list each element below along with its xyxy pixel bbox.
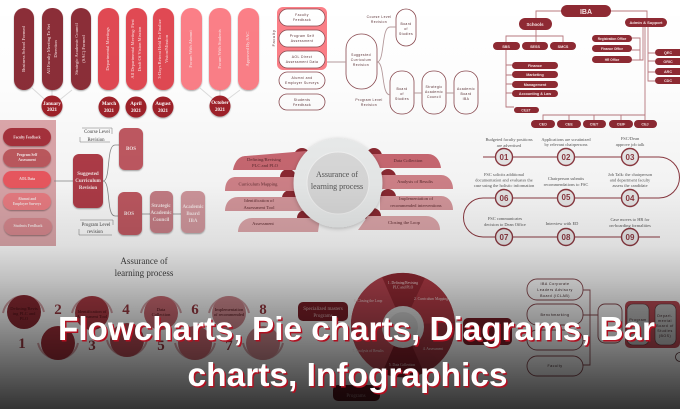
panel: organisation chart: CEJ <box>641 122 649 126</box>
chart: numbered circle steps: Data <box>157 307 165 312</box>
chart: pie diagram: 8. Closing the Loop <box>354 299 382 303</box>
panel: hiring process timeline <box>464 136 679 246</box>
panel: organisation chart: HR Office <box>605 58 619 62</box>
panel: curriculum revision outline flow: Council <box>427 95 441 99</box>
panel: timeline pills: All Departmental Meeting: First <box>130 19 135 79</box>
panel: hiring process timeline: Case moves to HR for <box>610 217 650 222</box>
title <box>58 310 657 394</box>
title: charts, Infographics <box>189 358 509 394</box>
diagram: assurance of learning process hub: recommended interventions <box>390 203 442 208</box>
panel: organisation chart: CED <box>539 122 547 126</box>
panel: curriculum revision filled flow: Revision <box>87 138 105 143</box>
panel: advisory board flow: Depart- <box>657 314 673 318</box>
panel: timeline pills <box>14 8 259 118</box>
panel: advisory board flow <box>527 279 680 376</box>
panel: hiring process timeline: 07 <box>500 233 509 242</box>
panel: hiring process timeline: assess the candidate <box>612 183 648 188</box>
panel: hiring process timeline: case using the holistic information <box>474 183 535 188</box>
chart: pie diagram: PLC and PLO <box>393 286 414 290</box>
title: Flowcharts, Pie charts, Diagrams, Bar <box>60 312 657 348</box>
panel: timeline pills: Direction <box>53 40 58 58</box>
chart: numbered circle steps: Defining/Revis <box>10 306 38 311</box>
panel: hiring process timeline: FSC/Dean <box>621 136 640 141</box>
panel: hiring process timeline: are advertised <box>497 143 522 148</box>
panel: timeline pills: August <box>155 102 171 107</box>
panel: organisation chart: Finance Office <box>601 47 623 51</box>
panel: timeline pills: (SAC) Formed <box>81 35 86 63</box>
chart: pie diagram <box>298 273 512 401</box>
panel: curriculum revision outline flow: Assessment Data <box>286 60 318 64</box>
panel: advisory board flow: Faculty <box>547 364 563 368</box>
panel: organisation chart: CIET <box>590 122 599 126</box>
panel: hiring process timeline: recommendations to FSC <box>544 182 588 187</box>
panel: timeline pills: Vision/Mission <box>164 34 169 63</box>
panel: organisation chart: CEE <box>565 122 573 126</box>
text: assurance of learning process caption <box>115 256 174 278</box>
diagram: assurance of learning process hub: Identification of <box>244 198 274 203</box>
panel: hiring process timeline: and department faculty <box>610 178 651 182</box>
panel: hiring process timeline: Chairperson submits <box>548 176 584 181</box>
panel: curriculum revision outline flow: Academic <box>457 87 475 91</box>
panel: curriculum revision outline flow: Feedback <box>293 18 311 22</box>
diagram: assurance of learning process hub <box>225 138 453 232</box>
diagram: assurance of learning process hub: Assessment Tool <box>243 205 275 210</box>
panel: organisation chart: SBS <box>502 45 510 49</box>
panel: hiring process timeline: 01 <box>500 153 509 162</box>
panel: timeline pills: Draft Of Vision Mission <box>137 26 142 71</box>
diagram: assurance of learning process hub: Curriculum Mapping <box>239 182 278 186</box>
panel: curriculum revision filled flow: Strategic <box>151 204 171 209</box>
panel: curriculum revision outline flow: Faculty <box>271 29 276 47</box>
text: assurance of learning process caption: learning process <box>115 268 174 278</box>
panel: advisory board flow: IBA Corporate <box>540 282 570 286</box>
panel: organisation chart: IBA <box>580 9 592 16</box>
panel: hiring process timeline: on-boarding formalities <box>609 223 651 228</box>
panel: curriculum revision outline flow: Board <box>396 87 408 91</box>
panel: curriculum revision outline flow: Feedback <box>293 103 311 107</box>
chart: numbered circle steps: ing PLC and <box>13 311 36 316</box>
panel: curriculum revision filled flow: Alumni and <box>18 197 36 201</box>
chart: numbered circle steps: 6 <box>191 302 199 318</box>
panel: curriculum revision outline flow: Curriculum <box>351 58 371 62</box>
panel: advisory board flow: (BOS) <box>659 334 671 338</box>
panel: hiring process timeline: Budgeted faculty positions <box>485 137 533 142</box>
panel: timeline pills: 3-Days Retreat Held To Finalize <box>157 19 162 79</box>
chart: numbered circle steps: Implementation <box>215 307 244 312</box>
chart: numbered circle steps: 4 <box>122 302 130 318</box>
panel: timeline pills: 2021 <box>47 108 58 113</box>
panel: hiring process timeline: 09 <box>626 233 635 242</box>
panel: curriculum revision outline flow: AOL Direct <box>292 55 312 59</box>
panel: curriculum revision filled flow: Assessment <box>18 158 37 162</box>
panel: advisory board flow: Leaders Advisory <box>537 288 573 292</box>
panel: organisation chart: Accounting & Law <box>519 92 551 96</box>
panel: curriculum revision outline flow: Academic <box>425 90 443 94</box>
panel: curriculum revision outline flow: Revision <box>353 63 369 67</box>
diagram: assurance of learning process hub: PLC and PLO <box>252 163 279 168</box>
panel: organisation chart: SMCS <box>558 45 569 49</box>
panel: curriculum revision filled flow: Curriculum <box>75 179 102 184</box>
panel: curriculum revision outline flow: Studies <box>395 97 409 101</box>
panel: organisation chart: ARC <box>664 70 672 74</box>
panel: timeline pills: Strategic Academic Council <box>74 23 79 75</box>
panel: curriculum revision outline flow: Studies <box>399 32 413 36</box>
chart: numbered circle steps: Assessment Tool <box>77 314 108 319</box>
panel: organisation chart: Management <box>524 83 547 87</box>
chart: pie diagram: 5. Data Collection <box>389 363 415 367</box>
panel: curriculum revision filled flow: Council <box>153 218 170 223</box>
panel: hiring process timeline: 06 <box>500 194 509 203</box>
panel: curriculum revision filled flow: Employer Surveys <box>13 202 42 206</box>
panel: curriculum revision filled flow: IBA <box>189 219 198 224</box>
panel: curriculum revision filled flow <box>0 120 205 246</box>
chart: numbered circle steps: Identification of <box>77 309 107 314</box>
chart: numbered circle steps: 1 <box>18 336 26 352</box>
panel: organisation chart: CILET <box>521 108 531 112</box>
panel: timeline pills: 2021 <box>131 109 142 114</box>
diagram: assurance of learning process hub: Assessment <box>252 221 275 226</box>
title: charts, Infographics <box>188 356 508 393</box>
panel: curriculum revision filled flow: revision <box>87 230 103 235</box>
panel: timeline pills: April <box>130 102 142 107</box>
panel: curriculum revision filled flow: Revision <box>79 186 97 191</box>
panel: curriculum revision outline flow: IBA <box>463 97 470 101</box>
panel: timeline pills: 2021 <box>215 108 226 113</box>
panel: organisation chart: Marketing <box>526 73 544 77</box>
diagram: assurance of learning process hub: learning process <box>311 182 363 191</box>
chart: numbered circle steps: 2 <box>54 302 62 318</box>
panel: hiring process timeline: by relevant chairpersons <box>545 142 588 147</box>
panel: organisation chart <box>493 5 680 128</box>
panel: organisation chart: Schools <box>526 22 544 27</box>
panel: curriculum revision outline flow: Students <box>294 98 310 102</box>
chart: pie diagram: 2. Curriculum Mapping <box>414 297 448 301</box>
panel: advisory board flow: Studies <box>657 329 673 333</box>
chart: pie diagram: Specialized masters <box>303 307 343 312</box>
panel: curriculum revision filled flow: Course Level <box>84 130 111 135</box>
diagram: assurance of learning process hub: Implementation of <box>399 196 433 201</box>
chart: numbered circle steps: of recommended <box>214 312 245 317</box>
panel: timeline pills: Forum With Students <box>217 29 222 69</box>
panel: curriculum revision filled flow: Suggested <box>77 172 99 177</box>
panel: curriculum revision outline flow: Suggested <box>351 53 371 57</box>
chart: numbered circle steps: Collection <box>152 312 171 317</box>
panel: organisation chart: SESS <box>530 45 540 49</box>
panel: advisory board flow: Board of <box>656 324 674 328</box>
chart: numbered circle steps: 7 <box>225 338 233 354</box>
panel: curriculum revision outline flow: of <box>400 92 404 96</box>
panel: curriculum revision filled flow: BOS <box>126 147 136 152</box>
panel: hiring process timeline: FSC solicits additional <box>484 172 525 177</box>
panel: curriculum revision filled flow: BOS <box>124 212 134 217</box>
panel: timeline pills: Approved By SAC <box>245 32 250 66</box>
panel: curriculum revision filled flow: Students Feedback <box>13 224 43 228</box>
panel: hiring process timeline: 02 <box>562 153 571 162</box>
panel: advisory board flow: Board (ICLAB) <box>540 294 570 298</box>
panel: hiring process timeline: Applications are scrutinized <box>541 137 591 142</box>
diagram: assurance of learning process hub: Analysis of Results <box>397 179 433 184</box>
panel: curriculum revision filled flow: Faculty Feedback <box>13 136 41 140</box>
panel: curriculum revision outline flow: Course Level <box>367 15 391 19</box>
panel: curriculum revision filled flow: Board <box>186 212 200 217</box>
panel: curriculum revision filled flow: Academic <box>150 211 172 216</box>
panel: hiring process timeline: 05 <box>562 193 571 202</box>
panel: curriculum revision outline flow: Program Self <box>290 34 314 38</box>
panel: timeline pills: March <box>102 102 116 107</box>
panel: timeline pills: 2021 <box>104 109 114 114</box>
chart: numbered circle steps: 8 <box>259 302 267 318</box>
chart: pie diagram: Programs <box>346 394 366 399</box>
chart: numbered circle steps: 5 <box>157 338 165 354</box>
panel: curriculum revision outline flow: Assessment <box>291 39 313 43</box>
panel: organisation chart: Admin & Support <box>630 20 663 25</box>
panel: hiring process timeline: Job Talk: the chairperson <box>608 172 653 177</box>
chart: pie diagram: Programs <box>313 314 333 319</box>
panel: organisation chart: Finance <box>528 64 542 68</box>
panel: curriculum revision outline flow: Program Level <box>355 98 383 102</box>
panel: hiring process timeline: 08 <box>562 233 571 242</box>
panel: timeline pills: 2021 <box>158 109 168 114</box>
chart: pie diagram: 1. Defining/Revising <box>388 281 418 285</box>
panel: timeline pills: Forum With Alumni <box>188 30 193 68</box>
title: Flowcharts, Pie charts, Diagrams, Bar <box>58 310 655 347</box>
panel: advisory board flow: Benchmarking <box>541 313 569 317</box>
text: assurance of learning process caption: Assurance of <box>120 256 168 266</box>
panel: timeline pills: October <box>211 101 230 106</box>
panel: advisory board flow: Program <box>629 318 647 322</box>
chart: numbered circle steps: PLO <box>20 316 29 321</box>
panel: curriculum revision outline flow <box>271 7 478 114</box>
chart: numbered circle steps: 3 <box>88 338 96 354</box>
diagram: assurance of learning process hub: Data Collection <box>394 158 423 163</box>
panel: hiring process timeline: documentation and evaluates the <box>475 178 533 182</box>
panel: curriculum revision outline flow: Revision <box>361 103 377 107</box>
panel: hiring process timeline: 03 <box>626 153 635 162</box>
panel: organisation chart: QEC <box>664 51 672 55</box>
panel: hiring process timeline: 04 <box>626 194 635 203</box>
panel: organisation chart: CDC <box>664 79 672 83</box>
panel: organisation chart: Registration Office <box>598 37 626 41</box>
panel: curriculum revision outline flow: Faculty <box>295 13 309 17</box>
panel: organisation chart: CEIF <box>617 122 626 126</box>
panel: curriculum revision outline flow: of <box>404 27 408 31</box>
panel: hiring process timeline: decision to Dean Office <box>484 222 526 227</box>
chart: pie diagram: 4. Assessment <box>423 347 443 351</box>
diagram: assurance of learning process hub: Assurance of <box>316 170 358 179</box>
panel: curriculum revision filled flow: AOL Data <box>19 177 35 181</box>
panel: advisory board flow: mental <box>658 319 672 323</box>
panel: curriculum revision outline flow: Revision <box>371 20 387 24</box>
panel: hiring process timeline: Interview with ED <box>546 221 578 226</box>
diagram: assurance of learning process hub: Defining/Revising <box>247 157 282 162</box>
panel: timeline pills: All Faculty Meeting To Set <box>46 23 51 74</box>
panel: hiring process timeline: approve job talk <box>616 142 645 147</box>
chart: pie diagram: 7. Analysis of Results <box>352 349 384 353</box>
chart: numbered circle steps <box>3 295 283 360</box>
panel: curriculum revision filled flow: Program Self <box>17 153 38 157</box>
panel: curriculum revision outline flow: Board <box>400 22 412 26</box>
panel: curriculum revision outline flow: Employer Surveys <box>285 81 319 85</box>
panel: timeline pills: January <box>43 102 61 107</box>
panel: organisation chart: ORIC <box>663 60 673 64</box>
panel: curriculum revision outline flow: Board <box>460 92 472 96</box>
panel: curriculum revision filled flow: Academic <box>182 205 204 210</box>
panel: curriculum revision outline flow: Alumni and <box>292 76 312 80</box>
diagram: assurance of learning process hub: Closing the Loop <box>388 220 421 225</box>
panel: curriculum revision filled flow: Program Level <box>82 223 111 228</box>
panel: hiring process timeline: FSC communicates <box>488 216 522 221</box>
panel: curriculum revision outline flow: Strategic <box>426 85 442 89</box>
panel: timeline pills: Business School Formed <box>21 25 26 72</box>
panel: timeline pills: Departmental Meetings <box>105 27 110 71</box>
